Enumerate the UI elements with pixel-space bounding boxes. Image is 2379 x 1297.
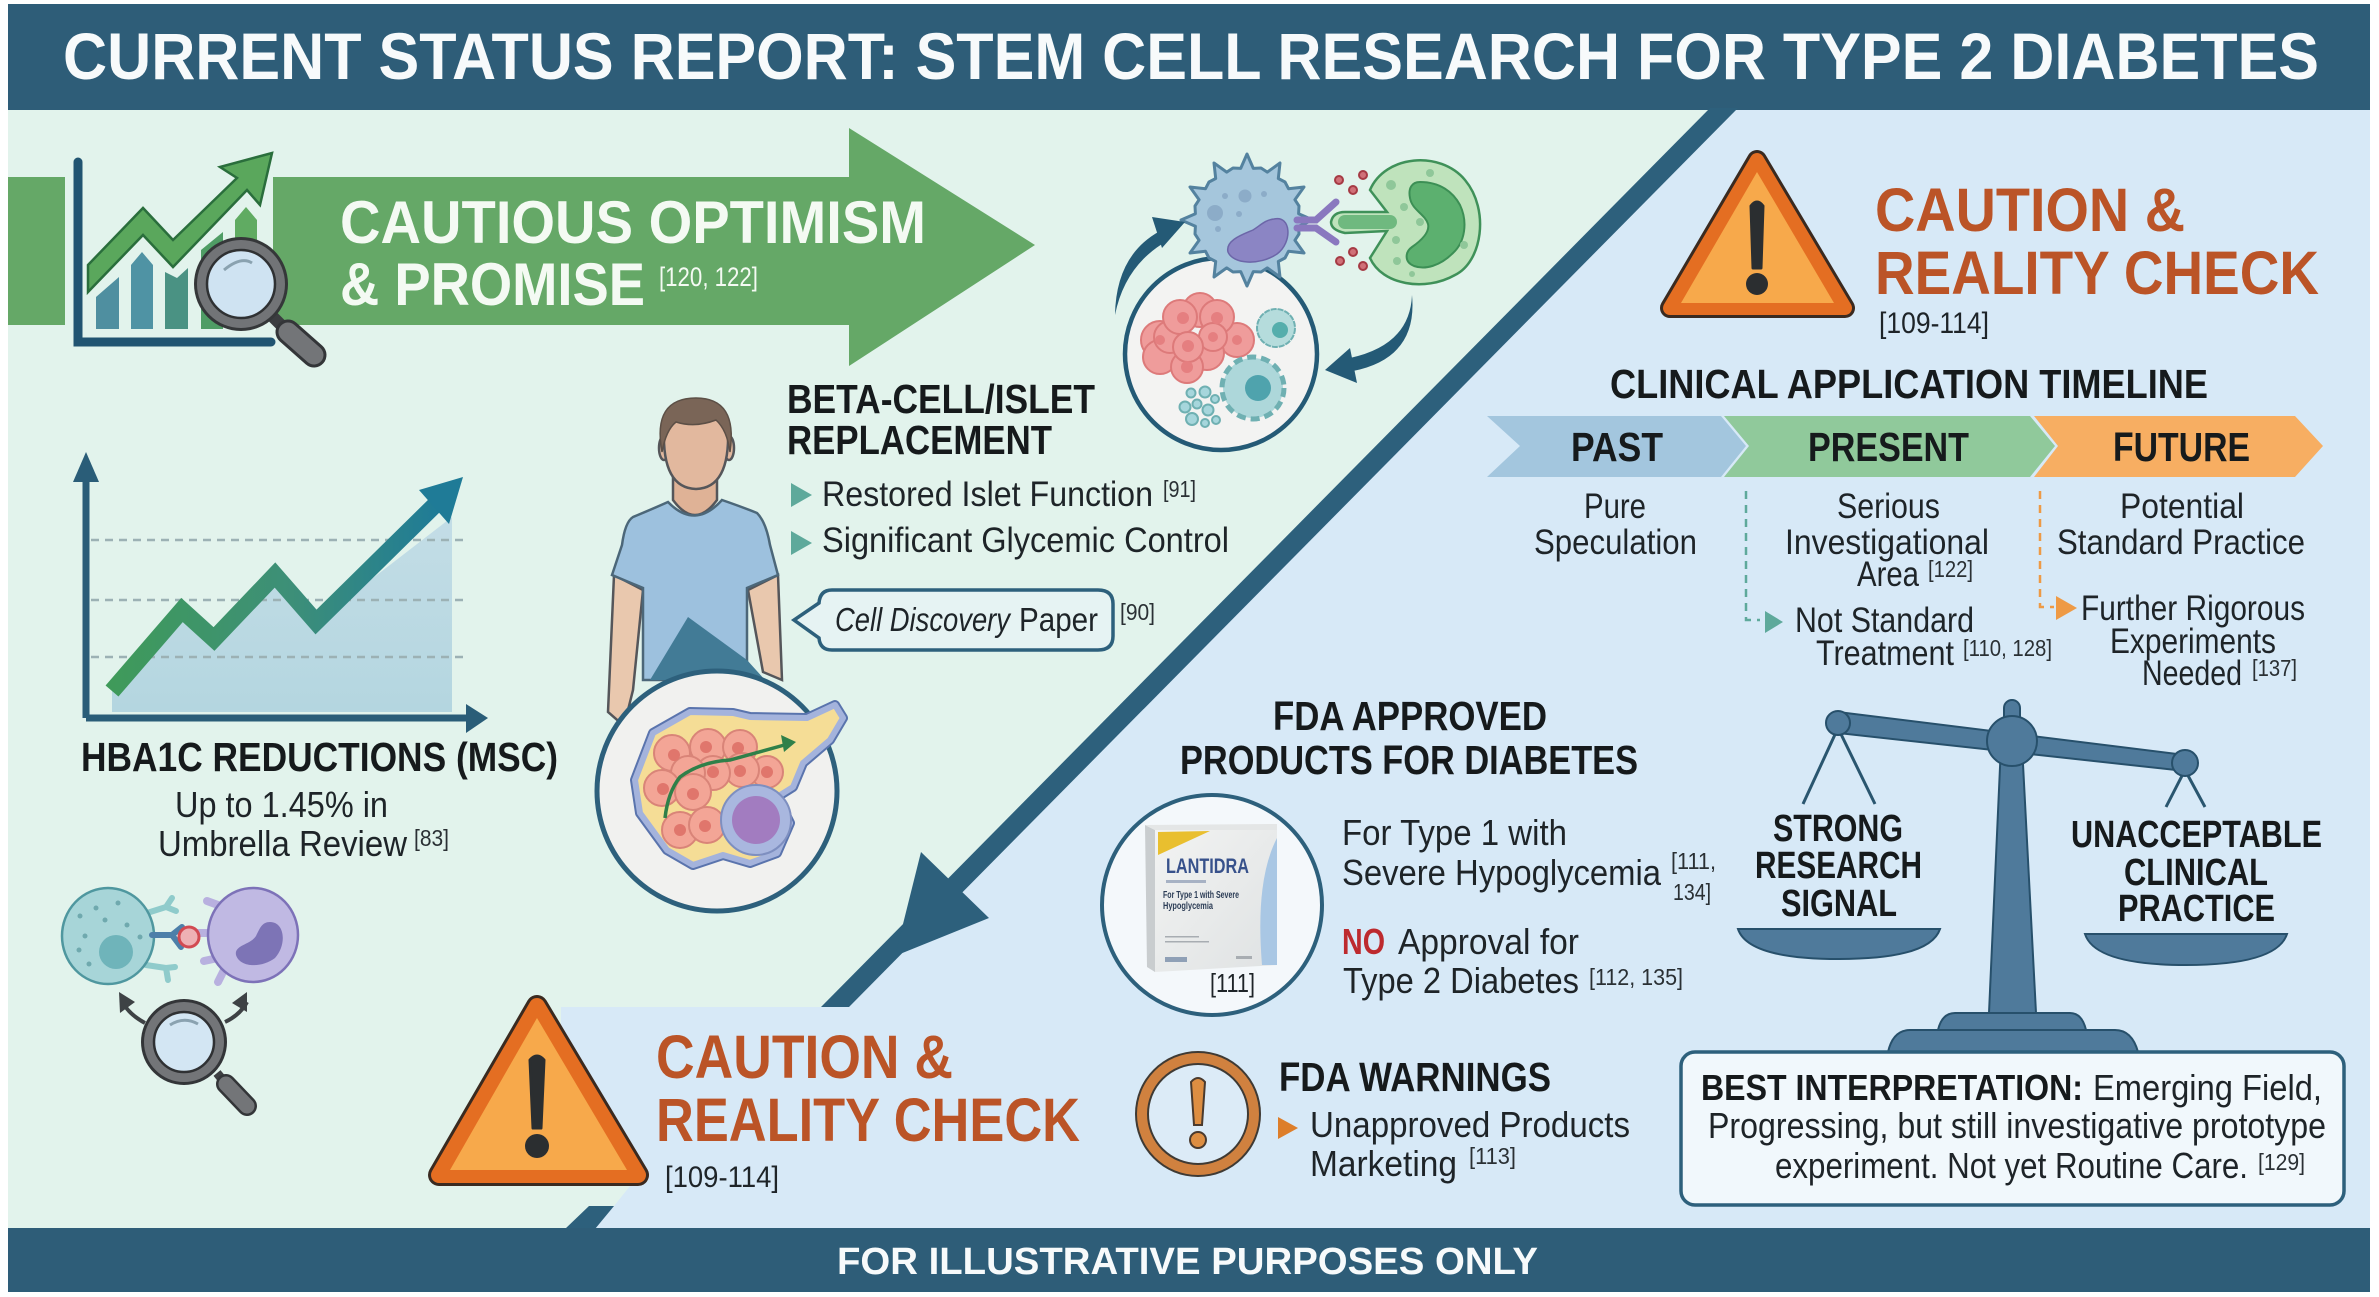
text: HbA1c reductions: [83] [414, 825, 449, 851]
callout: Cell Discovery paper: Paper [1019, 601, 1098, 638]
text: present column: Treatment [1816, 634, 1954, 673]
icon: growth chart with magnifier [78, 153, 314, 355]
heading and list: beta-cell replacement: REPLACEMENT [787, 417, 1052, 463]
icon: Lantidra product box: Hypoglycemia [1163, 901, 1213, 912]
heading: FDA approved products [1180, 693, 1638, 783]
heading: cautious optimism: CAUTIOUS OPTIMISM [340, 189, 926, 256]
icon: cell interaction with magnifier [62, 888, 298, 1106]
callout: Cell Discovery paper: [90] [1120, 599, 1155, 625]
text: strong research signal: RESEARCH [1755, 845, 1922, 887]
text: FDA product approval notes [1342, 812, 1716, 1001]
heading and list: beta-cell replacement: Restored Islet Function [822, 475, 1153, 514]
text: FDA product approval notes: Severe Hypoglycemia [1342, 852, 1662, 893]
text: HbA1c reductions [81, 734, 558, 864]
heading: clinical application timeline: CLINICAL APPLICATION TIMELINE [1610, 361, 2208, 407]
callout: best interpretation: Emerging Field, [2093, 1067, 2322, 1108]
heading: cautious optimism [340, 189, 926, 318]
text: future column: Further Rigorous [2081, 589, 2305, 628]
icon: Lantidra product box: For Type 1 with Severe [1163, 890, 1239, 901]
text: unacceptable clinical practice: CLINICAL [2124, 852, 2268, 894]
text: present column: Serious [1837, 487, 1940, 526]
icon: FDA warning circle [1135, 1051, 1261, 1177]
text: FDA warnings: FDA WARNINGS [1279, 1054, 1551, 1100]
text: unacceptable clinical practice: UNACCEPTABLE [2071, 814, 2322, 856]
text: present column: [122] [1928, 556, 1973, 582]
heading and list: beta-cell replacement [787, 376, 1229, 560]
text: FDA product approval notes: Type 2 Diabetes [1343, 960, 1579, 1001]
heading: FDA approved products: FDA APPROVED [1273, 693, 1547, 739]
text: HbA1c reductions: Up to 1.45% in [175, 784, 388, 825]
text: FDA warnings: [113] [1469, 1143, 1516, 1169]
heading: cautious optimism: & PROMISE [340, 251, 645, 318]
title banner [8, 4, 2370, 110]
text: present column: Investigational [1785, 523, 1989, 562]
panel: cautious optimism arrow banner [8, 128, 1035, 366]
icon: warning triangle upper [1670, 160, 1845, 308]
heading and list: beta-cell replacement: Significant Glycemic Control [822, 521, 1229, 560]
text: HbA1c reductions: HBA1C REDUCTIONS (MSC) [81, 734, 558, 780]
text: FDA warnings: Unapproved Products [1310, 1104, 1630, 1145]
text: FDA warnings: Marketing [1310, 1143, 1457, 1184]
heading: caution and reality check upper: CAUTION & [1875, 176, 2185, 244]
text: future column [2040, 487, 2305, 693]
text: present column: [110, 128] [1963, 635, 2052, 661]
heading: caution and reality check upper: REALITY CHECK [1875, 239, 2319, 307]
callout: best interpretation: experiment. Not yet Routine Care. [1775, 1145, 2248, 1186]
heading: caution and reality check lower: REALITY CHECK [656, 1086, 1080, 1154]
text: future column: Standard Practice [2057, 523, 2305, 562]
heading: caution and reality check upper: [109-114] [1879, 307, 1989, 340]
heading and list: beta-cell replacement: BETA-CELL/ISLET [787, 376, 1095, 422]
text: unacceptable clinical practice [2071, 814, 2322, 930]
text: FDA product approval notes: Approval for [1398, 921, 1579, 962]
heading: caution and reality check lower: CAUTION & [656, 1023, 953, 1091]
text: future column: [137] [2252, 655, 2297, 681]
callout: best interpretation [1681, 1052, 2344, 1205]
text: strong research signal: STRONG [1773, 808, 1903, 850]
callout: best interpretation: BEST INTERPRETATION: [1701, 1067, 2083, 1108]
diagonal divider arrow [565, 108, 1738, 1229]
text: FDA product approval notes: 134] [1673, 879, 1711, 905]
heading: FDA approved products: PRODUCTS FOR DIABETES [1180, 737, 1638, 783]
text: strong research signal: SIGNAL [1781, 883, 1897, 925]
text: past column [1534, 487, 1697, 562]
text: FDA product approval notes: NO [1342, 921, 1385, 962]
icon: balance scale [1738, 700, 2287, 1052]
icon: Lantidra product box: LANTIDRA [1166, 855, 1249, 878]
heading: caution and reality check lower: [109-114] [665, 1161, 779, 1194]
heading: cautious optimism: [120, 122] [659, 262, 758, 292]
icon: Lantidra product box: [111] [1210, 968, 1255, 998]
footer banner [8, 1228, 2370, 1292]
icon: warning triangle lower [439, 1006, 638, 1175]
timeline chevrons [1487, 416, 2323, 477]
text: future column: Potential [2120, 487, 2244, 526]
icon: Lantidra product box [1102, 795, 1322, 1015]
callout: Cell Discovery paper [794, 590, 1155, 650]
icon: person figure [608, 398, 782, 726]
heading: caution and reality check upper [1875, 176, 2319, 340]
text: future column: Needed [2142, 654, 2242, 693]
timeline chevrons: PRESENT [1808, 424, 1969, 470]
icon: pancreas close-up circle [597, 671, 843, 911]
text: FDA product approval notes: For Type 1 with [1342, 812, 1567, 853]
timeline chevrons: FUTURE [2113, 424, 2250, 470]
callout: best interpretation: [129] [2258, 1149, 2305, 1175]
text: present column [1746, 487, 2052, 673]
heading and list: beta-cell replacement: [91] [1163, 476, 1196, 502]
text: FDA product approval notes: [112, 135] [1589, 964, 1683, 990]
text: strong research signal [1755, 808, 1922, 925]
text: present column: Not Standard [1795, 601, 1974, 640]
callout: Cell Discovery paper: Cell Discovery [835, 601, 1012, 638]
chart: HbA1c line chart [73, 452, 488, 733]
text: FDA product approval notes: [111, [1671, 848, 1716, 874]
timeline chevrons: PAST [1571, 424, 1663, 470]
footer banner: FOR ILLUSTRATIVE PURPOSES ONLY [837, 1241, 1538, 1283]
heading: caution and reality check lower [656, 1023, 1080, 1194]
text: present column: Area [1857, 555, 1919, 594]
text: HbA1c reductions: Umbrella Review [158, 823, 408, 864]
text: past column: Pure [1584, 487, 1646, 526]
background: blue right side [561, 102, 2370, 1230]
icon: stem cell cycle [1115, 154, 1480, 450]
text: unacceptable clinical practice: PRACTICE [2118, 888, 2275, 930]
text: past column: Speculation [1534, 523, 1697, 562]
text: FDA warnings [1278, 1054, 1630, 1184]
text: future column: Experiments [2110, 622, 2276, 661]
